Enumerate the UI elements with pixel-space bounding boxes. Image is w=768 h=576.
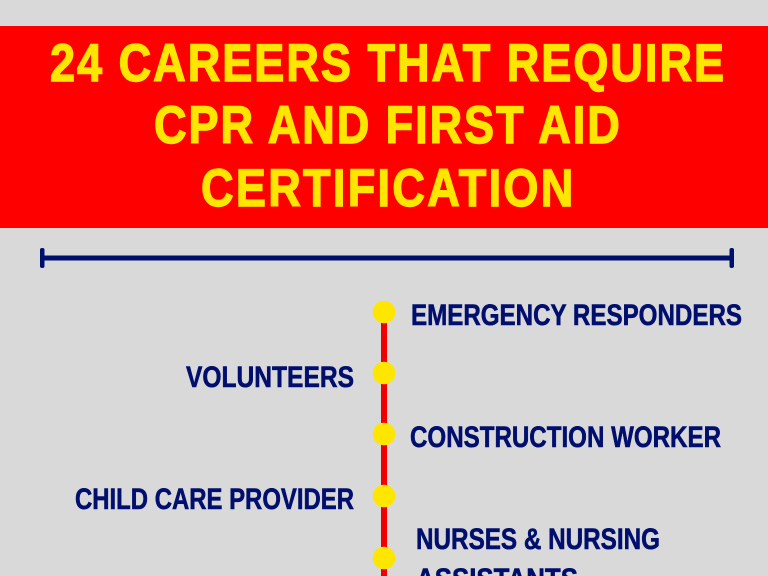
title: CPR AND FIRST AID [154,96,620,155]
title: 24 CAREERS THAT REQUIRE [50,34,724,93]
timeline markers [373,301,395,569]
title: CERTIFICATION [201,159,573,218]
career label: nurses and nursing assistants: NURSES & NURSING [416,523,660,556]
timeline [75,299,742,576]
title [50,34,724,218]
title banner [0,26,768,228]
career label: volunteers: VOLUNTEERS [186,361,354,394]
timeline spine [381,312,387,576]
horizontal span bar [40,248,734,268]
career label: nurses and nursing assistants [416,523,660,576]
career label: child care provider: CHILD CARE PROVIDER [75,483,354,516]
